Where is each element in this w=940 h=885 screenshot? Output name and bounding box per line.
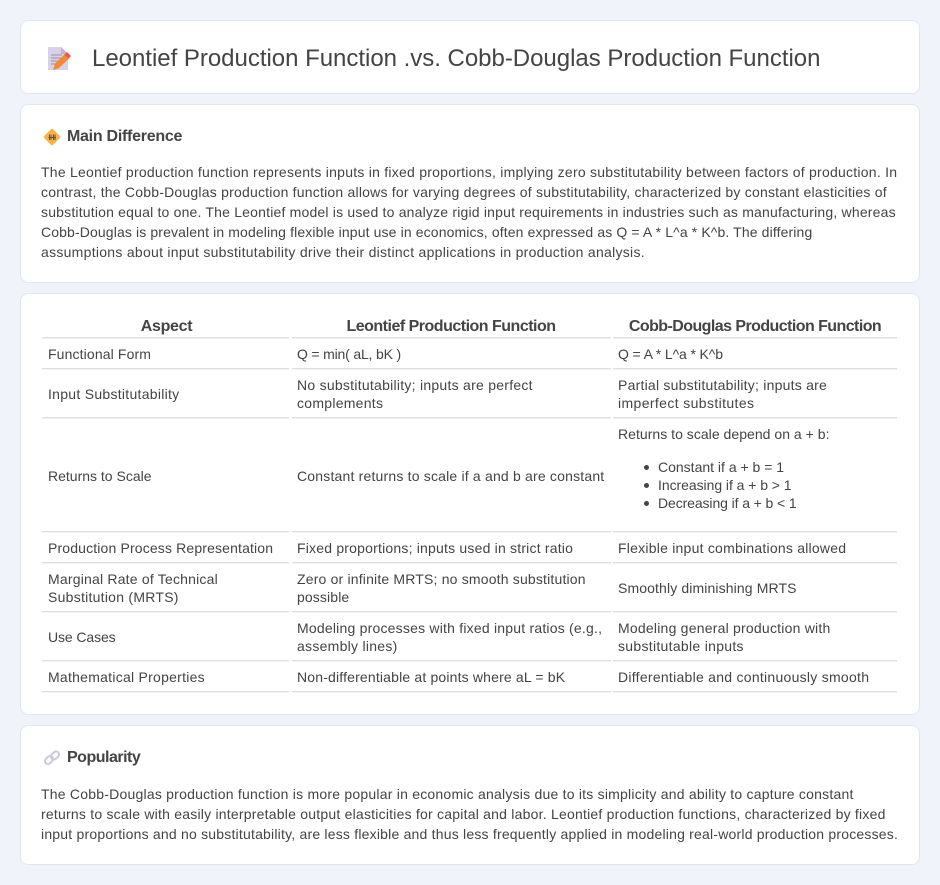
row: marginal rate of technical substitution: Substitution (MRTS) bbox=[48, 589, 179, 605]
row: functional form bbox=[48, 346, 723, 362]
row: use cases: Modeling general production with bbox=[618, 620, 831, 636]
text block: popularity bbox=[41, 786, 898, 842]
row: input substitutability: Partial substitutability; inputs are bbox=[618, 377, 827, 393]
row: returns to scale: Constant returns to scale if a and b are constant bbox=[297, 468, 604, 484]
row: use cases: Use Cases bbox=[48, 629, 116, 645]
panel: comparison table bbox=[20, 293, 920, 715]
row: marginal rate of technical substitution bbox=[48, 571, 797, 605]
row: returns to scale: Constant if a + b = 1 bbox=[658, 459, 784, 475]
table header: Leontief Production Function bbox=[346, 318, 556, 335]
row: returns to scale: Decreasing if a + b < 1 bbox=[658, 495, 797, 511]
row: returns to scale: Increasing if a + b > 1 bbox=[658, 477, 792, 493]
row: returns to scale bbox=[48, 426, 830, 511]
row: use cases: assembly lines) bbox=[297, 638, 398, 654]
text block: popularity: The Cobb-Douglas production function is more popular in economic analysis due to its simplicity and ability to capture constant bbox=[41, 786, 854, 802]
heading: popularity: Popularity bbox=[67, 749, 140, 766]
row: functional form: Functional Form bbox=[48, 346, 151, 362]
row: input substitutability: Input Substitutability bbox=[48, 386, 179, 402]
text block: main difference: substitution equal to one. The Leontief model is used to analyze rigid input requirements in industries such as manufacturing, whereas bbox=[41, 204, 896, 220]
row: input substitutability bbox=[48, 377, 827, 411]
row: production process representation: Fixed proportions; inputs used in strict ratio bbox=[297, 540, 573, 556]
text block: main difference: The Leontief production function represents inputs in fixed proportions, implying zero substitutability between factors of production. In bbox=[41, 164, 897, 180]
row: functional form: Q = min( aL, bK ) bbox=[297, 346, 401, 362]
panel: main difference bbox=[20, 104, 920, 283]
icon: diamond sign bbox=[44, 128, 60, 146]
table header: Cobb-Douglas Production Function bbox=[629, 318, 881, 335]
text block: popularity: returns to scale with easily interpretable output elasticities for capital and labor. Leontief production functions, characterized by fixed bbox=[41, 806, 886, 822]
table header bbox=[141, 318, 881, 335]
row: use cases bbox=[48, 620, 831, 654]
row: mathematical properties bbox=[48, 669, 869, 685]
row: mathematical properties: Non-differentiable at points where aL = bK bbox=[297, 669, 565, 685]
text block: main difference: assumptions about input substitutability drive their distinct applications in production analysis. bbox=[41, 244, 645, 260]
table header: Aspect bbox=[141, 318, 192, 335]
text block: popularity: input proportions and no substitutability, are less flexible and thus less frequently applied in modeling real-world production processes. bbox=[41, 826, 898, 842]
panel: popularity bbox=[20, 725, 920, 865]
row: use cases: substitutable inputs bbox=[618, 638, 744, 654]
row: input substitutability: complements bbox=[297, 395, 383, 411]
heading: main difference: Main Difference bbox=[67, 128, 182, 145]
row: marginal rate of technical substitution: Marginal Rate of Technical bbox=[48, 571, 218, 587]
icon: chain link bbox=[44, 750, 60, 765]
title: Leontief Production Function .vs. Cobb-Douglas Production Function bbox=[92, 45, 820, 72]
row: marginal rate of technical substitution: possible bbox=[297, 589, 349, 605]
row: marginal rate of technical substitution: Zero or infinite MRTS; no smooth substitution bbox=[297, 571, 586, 587]
icon: document with pencil bbox=[48, 47, 71, 70]
text block: main difference bbox=[41, 164, 897, 260]
row: production process representation bbox=[48, 540, 846, 556]
row: functional form: Q = A * L^a * K^b bbox=[618, 346, 723, 362]
row: returns to scale: Returns to Scale bbox=[48, 468, 152, 484]
row: returns to scale: Returns to scale depend on a + b: bbox=[618, 426, 830, 442]
row: marginal rate of technical substitution: Smoothly diminishing MRTS bbox=[618, 580, 797, 596]
panel: title card bbox=[20, 20, 920, 94]
row: input substitutability: No substitutability; inputs are perfect bbox=[297, 377, 533, 393]
row: production process representation: Flexible input combinations allowed bbox=[618, 540, 846, 556]
row: mathematical properties: Differentiable and continuously smooth bbox=[618, 669, 869, 685]
text block: main difference: contrast, the Cobb-Douglas production function allows for varying degrees of substitutability, characterized by constant elasticities of bbox=[41, 184, 887, 200]
row: production process representation: Production Process Representation bbox=[48, 540, 273, 556]
text block: main difference: Cobb-Douglas is prevalent in modeling flexible input use in economics, often expressed as Q = A * L^a * K^b. The differing bbox=[41, 224, 812, 240]
row: use cases: Modeling processes with fixed input ratios (e.g., bbox=[297, 620, 602, 636]
row: mathematical properties: Mathematical Properties bbox=[48, 669, 205, 685]
row: input substitutability: imperfect substitutes bbox=[618, 395, 754, 411]
